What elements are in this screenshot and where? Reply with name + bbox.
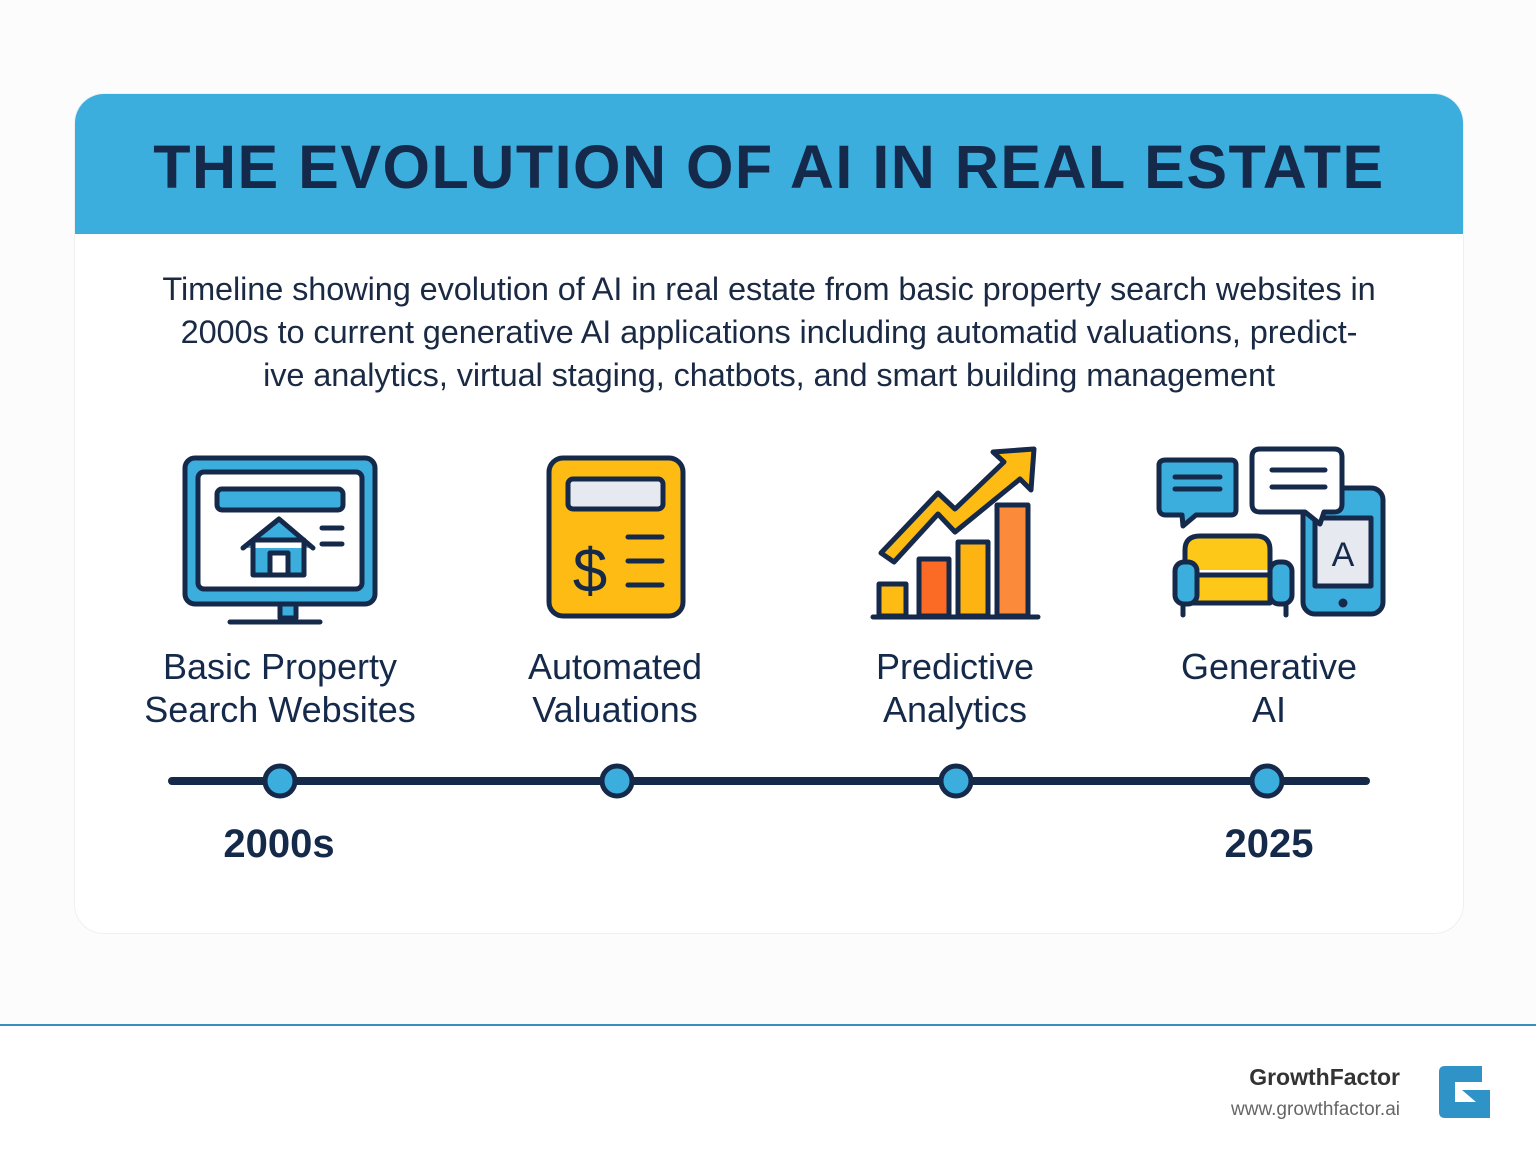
footer brand text: www.growthfactor.ai	[1231, 1099, 1400, 1120]
label: generative AI: AI	[1252, 689, 1286, 730]
description text: 2000s to current generative AI applications including automatid valuations, predict-	[181, 314, 1357, 350]
timeline	[172, 766, 1366, 796]
footer divider	[0, 1024, 1536, 1156]
icon: calculator with dollar: $	[573, 537, 607, 606]
icon: computer with house	[185, 458, 375, 622]
year: 2000s: 2000s	[223, 822, 335, 866]
icon: growth chart	[873, 449, 1038, 617]
panel: main card	[74, 93, 1464, 934]
label: basic property search: Search Websites	[144, 689, 416, 730]
logo	[1439, 1066, 1490, 1118]
icon: calculator with dollar	[549, 458, 683, 616]
label: automated valuations: Valuations	[532, 689, 698, 730]
label: automated valuations	[528, 646, 702, 730]
title: THE EVOLUTION OF AI IN REAL ESTATE	[153, 133, 1385, 201]
label: basic property search	[144, 646, 416, 730]
description text: Timeline showing evolution of AI in real estate from basic property search websites in	[162, 271, 1376, 307]
label: predictive analytics: Predictive	[876, 646, 1034, 687]
label: automated valuations: Automated	[528, 646, 702, 687]
label: generative AI: Generative	[1181, 646, 1357, 687]
description text: ive analytics, virtual staging, chatbots, and smart building management	[263, 357, 1275, 393]
footer brand text	[1231, 1064, 1400, 1120]
label: basic property search: Basic Property	[163, 646, 397, 687]
footer brand text: GrowthFactor	[1249, 1064, 1400, 1090]
icon: generative AI (chat, sofa, phone): A	[1332, 536, 1355, 574]
icon: generative AI (chat, sofa, phone)	[1159, 449, 1383, 615]
label: predictive analytics: Analytics	[883, 689, 1027, 730]
label: generative AI	[1181, 646, 1357, 730]
label: predictive analytics	[876, 646, 1034, 730]
description text	[162, 271, 1376, 393]
year: 2025: 2025	[1224, 822, 1313, 866]
header band	[75, 94, 1463, 234]
